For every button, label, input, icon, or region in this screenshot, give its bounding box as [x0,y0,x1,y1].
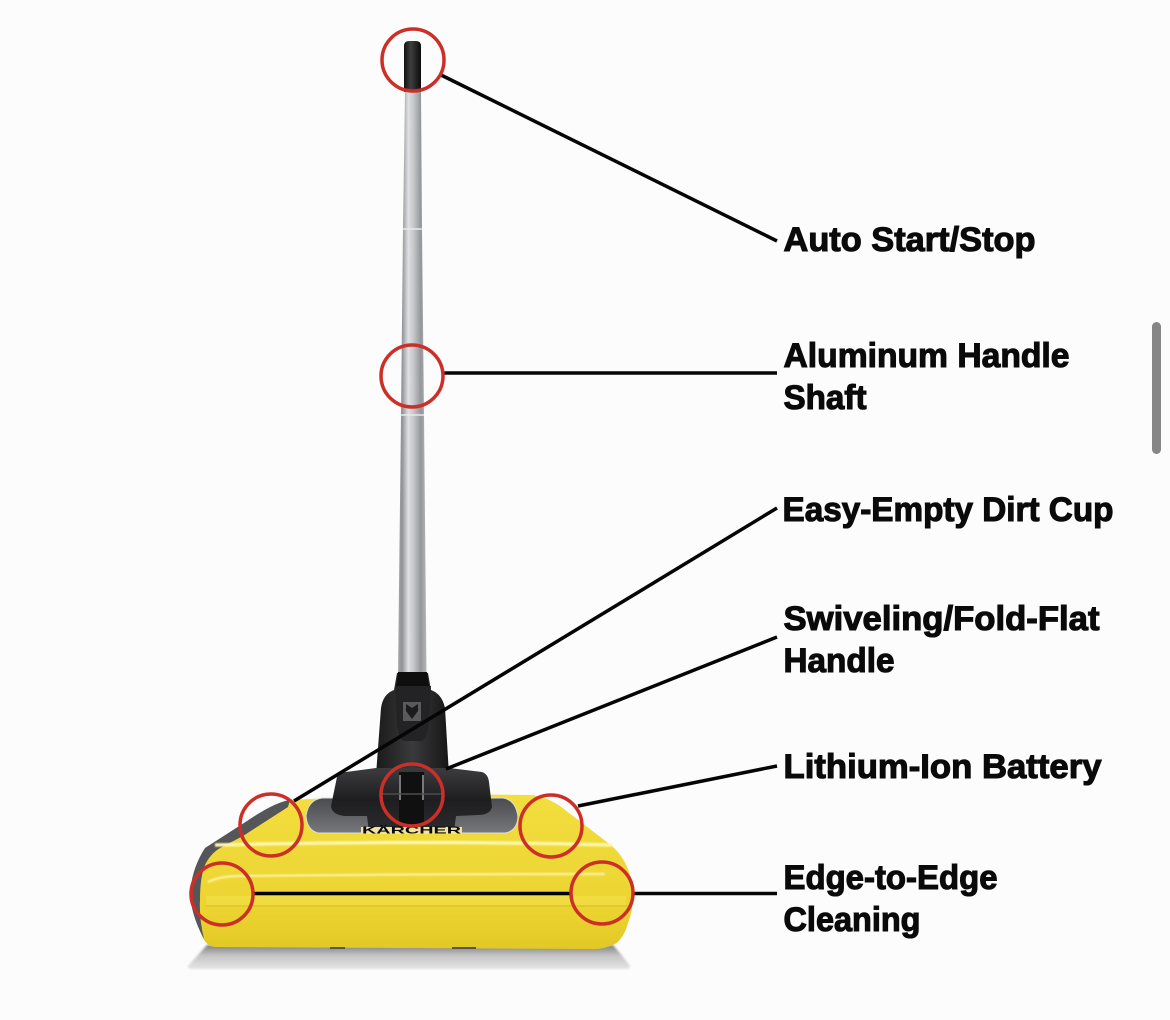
leader: easy-empty dirt cup [294,508,777,801]
leader: edge-to-edge label [634,892,777,895]
label: Aluminum Handle Shaft [784,337,1070,417]
sweeper product illustration [188,41,633,969]
swivel neck [376,673,449,775]
aluminum handle shaft [398,92,426,674]
label: Edge-to-Edge Cleaning [784,859,998,939]
neck logo badge [403,702,421,721]
body highlights [215,842,612,845]
brand plate: KÄRCHER [362,824,463,836]
label: Swiveling/Fold-Flat Handle [784,600,1100,680]
circle: shaft [381,345,443,407]
handle grip [404,41,421,92]
circle: battery [520,795,582,857]
label: Easy-Empty Dirt Cup: Easy-Empty Dirt Cup [782,491,1114,529]
red callout circles [191,29,633,925]
leader: edge-to-edge left-right [254,892,570,895]
circle: grip [382,29,444,91]
neck front panel [395,686,431,741]
label: Swiveling/Fold-Flat Handle: Swiveling/Fold-Flat [784,600,1100,638]
scrollbar [1152,322,1161,454]
leader: auto start/stop [441,75,777,241]
label: Swiveling/Fold-Flat Handle: Handle [784,642,894,680]
swivel joint [382,772,442,825]
motor housing [331,768,492,832]
circle: swivel [381,764,443,826]
circle: dirt cup [240,794,302,856]
leader: lithium-ion battery [578,766,777,806]
yellow sweeper body [190,795,633,949]
label: Edge-to-Edge Cleaning: Cleaning [784,901,920,939]
label: Aluminum Handle Shaft: Aluminum Handle [784,337,1070,375]
leader lines [254,75,777,894]
dirt cup recess [306,798,518,833]
floor shadow [188,945,630,969]
leader: swiveling handle [446,637,777,769]
feet [330,947,476,949]
label: Auto Start/Stop: Auto Start/Stop [784,221,1036,259]
label: Edge-to-Edge Cleaning: Edge-to-Edge [784,859,998,897]
brand plate [361,824,463,836]
circle: left edge [191,863,253,925]
label: Lithium-Ion Battery: Lithium-Ion Battery [784,748,1102,786]
dark left edge trim [190,800,290,939]
circle: right edge [571,862,633,924]
leader: aluminum handle shaft [443,371,777,375]
neck collar [396,672,429,686]
label: Aluminum Handle Shaft: Shaft [784,379,866,417]
